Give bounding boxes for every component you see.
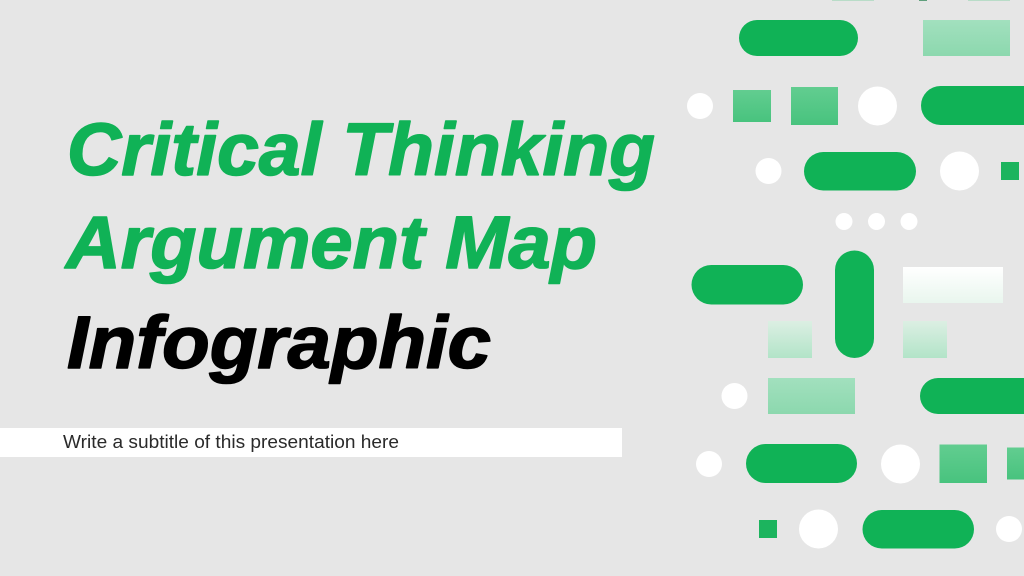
middle cluster — [692, 250, 1003, 358]
row 2 — [687, 86, 1024, 126]
title line: Critical Thinking: Critical Thinking — [67, 108, 655, 191]
row 1 — [739, 20, 1010, 56]
three dots — [836, 213, 918, 230]
decorative shape pattern — [687, 0, 1024, 548]
subtitle text: Write a subtitle of this presentation here — [63, 431, 399, 452]
subtitle bar — [0, 428, 622, 457]
top edge fragments — [832, 0, 1010, 1]
subtitle background — [0, 428, 622, 457]
row 3 — [756, 152, 1019, 190]
title line: Infographic: Infographic — [67, 301, 491, 384]
title — [64, 108, 655, 384]
row 6 — [759, 510, 1022, 548]
row 4 — [722, 378, 1024, 414]
row 5 — [696, 444, 1024, 484]
title line: Argument Map: Argument Map — [64, 201, 597, 284]
